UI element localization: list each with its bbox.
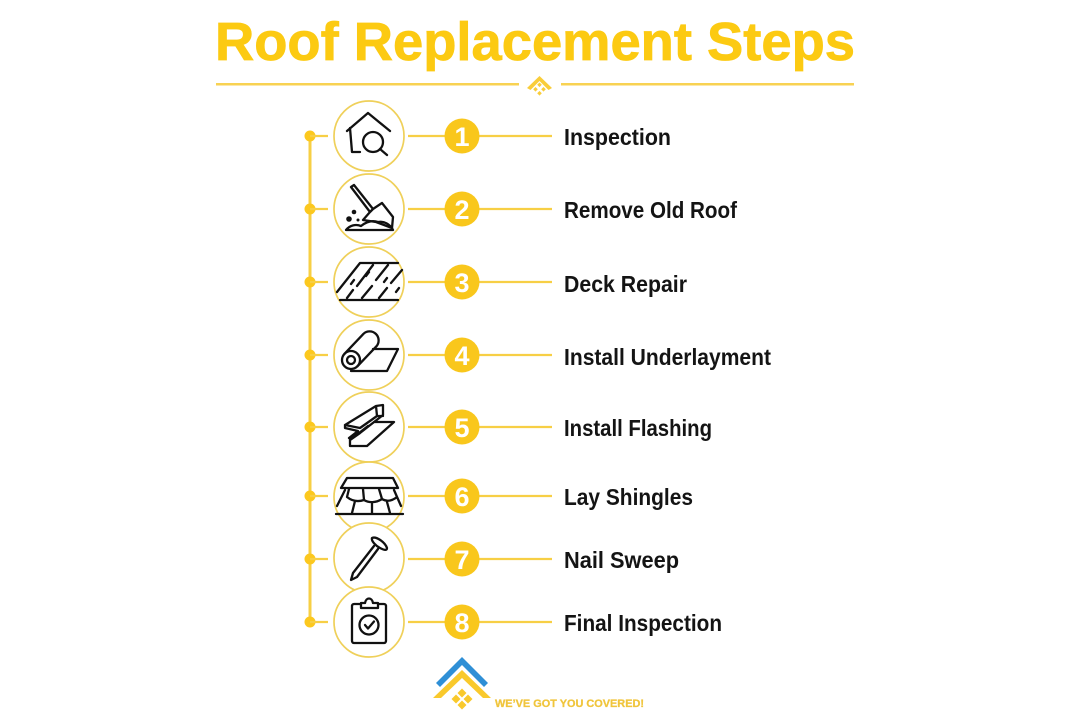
icon: metal flashing: [334, 392, 404, 462]
logo: roof mark and tagline: [433, 657, 644, 710]
step 6: Lay Shingles: 6: [454, 482, 470, 512]
icon: shovel and debris: [334, 174, 404, 244]
step 6: Lay Shingles: Lay Shingles: [564, 484, 693, 510]
step 8: Final Inspection: [304, 587, 722, 657]
tagline: WE’VE GOT YOU COVERED!: [495, 698, 644, 710]
icon: yellow roof chevron: [433, 670, 491, 698]
step 5: Install Flashing: [304, 392, 712, 462]
icon: house with magnifier: [334, 101, 404, 171]
step 5: Install Flashing: Install Flashing: [564, 415, 712, 441]
step 3: Deck Repair: 3: [454, 268, 470, 298]
step 4: Install Underlayment: 4: [454, 341, 470, 371]
icon: yellow diamonds: [452, 688, 472, 710]
step 2: Remove Old Roof: Remove Old Roof: [564, 197, 737, 223]
step 4: Install Underlayment: Install Underlayment: [564, 344, 771, 370]
step 1: Inspection: 1: [454, 122, 470, 152]
step 1: Inspection: Inspection: [564, 124, 671, 150]
icon: underlayment roll: [334, 320, 404, 390]
step 2: Remove Old Roof: 2: [454, 195, 470, 225]
icon: shingled roof: [334, 462, 404, 532]
icon: roof deck planks: [334, 247, 404, 317]
step 1: Inspection: [304, 101, 671, 171]
title divider with roof emblem: [216, 76, 854, 96]
step 7: Nail Sweep: Nail Sweep: [564, 547, 679, 573]
timeline spine: [308, 136, 312, 622]
icon: nail: [334, 523, 404, 593]
step 7: Nail Sweep: [304, 523, 679, 593]
icon: clipboard with check: [334, 587, 404, 657]
step 8: Final Inspection: Final Inspection: [564, 610, 722, 636]
step 2: Remove Old Roof: [304, 174, 737, 244]
step 3: Deck Repair: Deck Repair: [564, 271, 687, 297]
step 5: Install Flashing: 5: [454, 413, 470, 443]
step 7: Nail Sweep: 7: [454, 545, 470, 575]
step 6: Lay Shingles: [304, 462, 693, 532]
step 8: Final Inspection: 8: [454, 608, 470, 638]
step 3: Deck Repair: [304, 247, 687, 317]
title: Roof Replacement Steps: [215, 12, 855, 72]
icon: blue roof chevron: [436, 657, 488, 687]
step 4: Install Underlayment: [304, 320, 771, 390]
